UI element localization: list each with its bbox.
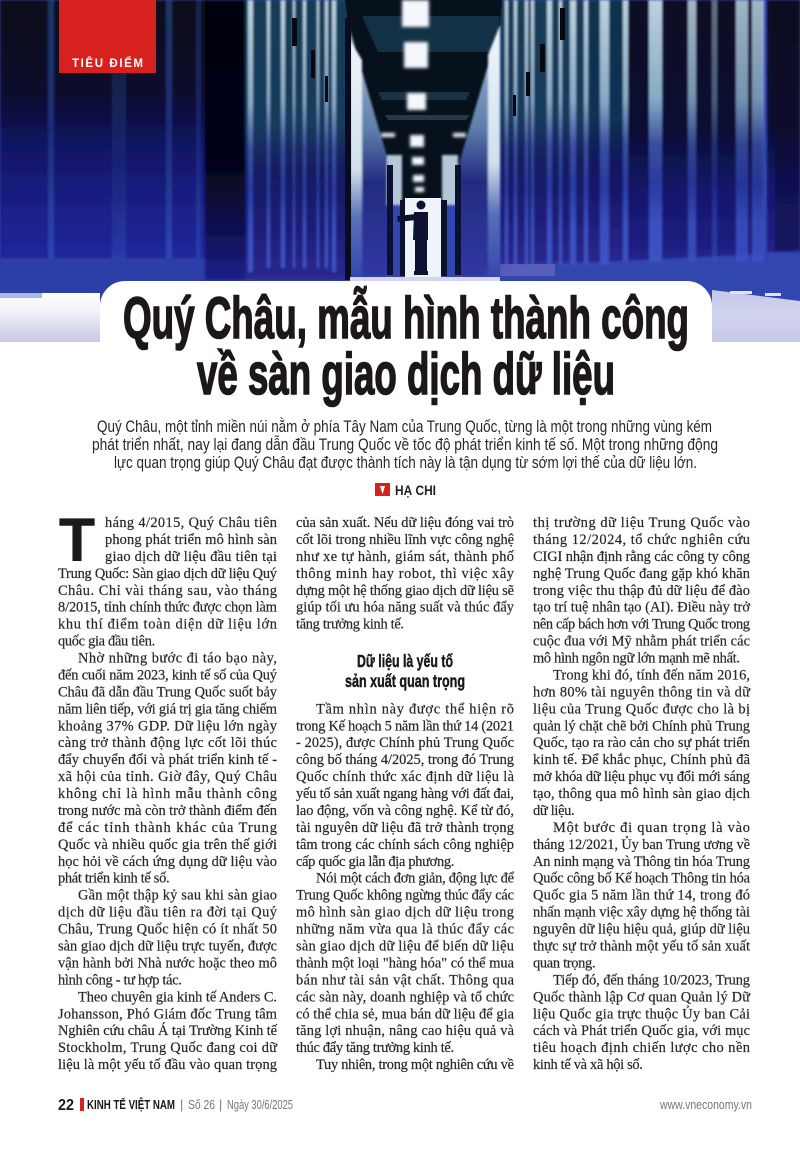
paragraph 10 xyxy=(533,668,751,819)
paragraph 2: đến cuối năm 2023, kinh tế số của Quý xyxy=(58,668,278,684)
paragraph 6: - 2025), được Chính phủ Trung Quốc xyxy=(296,735,514,751)
paragraph 2: học hỏi về cách ứng dụng dữ liệu vào xyxy=(58,854,277,870)
title card xyxy=(100,281,712,342)
paragraph 4: Nghiên cứu châu Á tại Trường Kinh tế xyxy=(58,1022,278,1039)
column 2 xyxy=(296,515,515,1073)
paragraph 6: trong Kế hoạch 5 năm lần thứ 14 (2021 xyxy=(296,718,514,734)
paragraph 5: thông minh hay robot, thì việc xây xyxy=(296,566,515,582)
paragraph 4: Johansson, Phó Giám đốc Trung tâm xyxy=(58,1006,277,1022)
paragraph 9: tháng 12/2024, tổ chức nghiên cứu xyxy=(533,532,750,548)
paragraph 5 xyxy=(296,515,515,633)
paragraph 2: năm liên tiếp, với giá trị gia tăng chiếm xyxy=(58,701,277,717)
title xyxy=(123,286,689,407)
paragraph 5: giúp tối ưu hóa năng suất và thúc đẩy xyxy=(296,600,515,616)
paragraph 3 xyxy=(58,888,278,988)
paragraph 5: của sản xuất. Nếu dữ liệu đóng vai trò xyxy=(296,515,514,531)
paragraph 1: Châu. Chỉ vài tháng sau, vào tháng xyxy=(58,583,277,599)
paragraph 3: vận hành bởi Nhà nước hoặc theo mô xyxy=(58,955,277,971)
paragraph 7: các sàn này, doanh nghiệp và tổ chức xyxy=(296,989,514,1005)
footer xyxy=(58,1097,752,1114)
paragraph 7: Nói một cách đơn giản, động lực để xyxy=(316,871,515,887)
paragraph 6: công bố tháng 4/2025, trong đó Trung xyxy=(296,752,514,768)
paragraph 1: phong phát triển mô hình sàn xyxy=(105,532,277,548)
paragraph 9: tạo trí tuệ nhân tạo (AI). Điều này trở xyxy=(533,600,750,616)
subheading xyxy=(345,651,465,691)
paragraph 7: thúc đẩy tăng trưởng kinh tế. xyxy=(296,1040,454,1056)
paragraph 10: Quốc, tạo ra rào cản cho sự phát triển xyxy=(533,735,750,751)
issue and date: | xyxy=(180,1098,183,1112)
subheading: Dữ liệu là yếu tố xyxy=(357,651,453,671)
byline: HẠ CHI xyxy=(395,482,436,498)
footer: Số 26 xyxy=(188,1098,215,1112)
paragraph 12: liệu Quốc gia trực thuộc Ủy ban Cải xyxy=(533,1005,750,1022)
paragraph 7: sàn giao dịch dữ liệu để biến dữ liệu xyxy=(296,938,514,954)
paragraph 9: cuộc đua với Mỹ nhằm phát triển các xyxy=(533,634,750,650)
paragraph 7 xyxy=(296,871,515,1056)
column 3 xyxy=(533,515,751,1073)
paragraph 10: kinh tế. Để khắc phục, Chính phủ đã xyxy=(533,752,751,768)
paragraph 2: khoảng 37% GDP. Dữ liệu lớn ngày xyxy=(58,718,278,734)
paragraph 1: khu thí điểm toàn diện dữ liệu lớn xyxy=(58,617,277,633)
drop cap: T xyxy=(59,506,95,574)
paragraph 11: An ninh mạng và Thông tin hóa Trung xyxy=(533,854,750,870)
paragraph 7: thành một loại "hàng hóa" có thể mua xyxy=(296,955,515,971)
paragraph 10: quản lý chặt chẽ bởi Chính phủ Trung xyxy=(533,718,750,734)
paragraph 12: kinh tế và xã hội số. xyxy=(533,1057,643,1073)
byline xyxy=(375,482,436,498)
paragraph 5: cốt lõi trong nhiều lĩnh vực công nghệ xyxy=(296,532,514,548)
paragraph 11 xyxy=(533,820,751,971)
paragraph 2: đẩy chuyển đổi và phát triển kinh tế - xyxy=(58,752,277,768)
paragraph 2: không chỉ là hình mẫu thành công xyxy=(58,786,277,802)
section tag: TIÊU ĐIỂM: TIÊU ĐIỂM xyxy=(72,57,143,70)
paragraph 3: dịch dữ liệu đầu tiên ra đời tại Quý xyxy=(58,905,278,921)
paragraph 2: xã hội của tỉnh. Giờ đây, Quý Châu xyxy=(58,769,277,785)
paragraph 3: sàn giao dịch dữ liệu trực tuyến, được xyxy=(58,938,277,954)
paragraph 2: phát triển kinh tế số. xyxy=(58,871,169,887)
paragraph 2: trong nước mà còn trở thành điểm đến xyxy=(58,803,277,819)
intro paragraph xyxy=(92,417,718,472)
paragraph 6: tài nguyên dữ liệu đã trở thành trọng xyxy=(296,820,514,836)
paragraph 7: Trung Quốc không ngừng thúc đẩy các xyxy=(296,888,514,904)
paragraph 12: cách và Phát triển Quốc gia, với mục xyxy=(533,1023,750,1039)
paragraph 12: Quốc thành lập Cơ quan Quản lý Dữ xyxy=(533,989,751,1005)
paragraph 7: có thể chia sẻ, mua bán dữ liệu để gia xyxy=(296,1006,515,1022)
paragraph 2: Quốc và nhiều quốc gia trên thế giới xyxy=(58,837,277,853)
paragraph 6 xyxy=(296,701,515,870)
paragraph 9: nghệ Trung Quốc đang gặp khó khăn xyxy=(533,566,750,582)
hero photo: data centre corridor xyxy=(0,0,800,342)
paragraph 1: giao dịch dữ liệu đầu tiên tại xyxy=(105,549,277,565)
paragraph 6: yếu tố sản xuất ngang hàng với đất đai, xyxy=(296,786,514,802)
paragraph 2: càng trở thành động lực cốt lõi thúc xyxy=(58,735,277,751)
red marker xyxy=(80,1098,84,1111)
paragraph 5: tăng trưởng kinh tế. xyxy=(296,617,404,633)
paragraph 4: Theo chuyên gia kinh tế Anders C. xyxy=(78,989,277,1005)
paragraph 11: Quốc gia 5 năm lần thứ 14, trong đó xyxy=(533,888,750,904)
paragraph 10: hơn 80% tài nguyên thông tin và dữ xyxy=(533,684,751,700)
icon: man standing in corridor xyxy=(397,200,428,275)
paragraph 6: cấp quốc gia lẫn địa phương. xyxy=(296,854,454,870)
paragraph 5: như xe tự hành, giám sát, thành phố xyxy=(296,549,514,565)
paragraph 9 xyxy=(533,515,750,666)
paragraph 9: nên cấp bách hơn với Trung Quốc trong xyxy=(533,617,750,633)
paragraph 12 xyxy=(533,972,751,1073)
paragraph 9: mô hình ngôn ngữ lớn mạnh mẽ nhất. xyxy=(533,650,740,666)
subheading: sản xuất quan trọng xyxy=(345,671,465,691)
section tag: TIÊU ĐIỂM xyxy=(59,0,156,73)
paragraph 10: Trong khi đó, tính đến năm 2016, xyxy=(553,668,750,684)
paragraph 6: lao động, vốn và công nghệ. Kể từ đó, xyxy=(296,803,514,819)
paragraph 11: tháng 12/2021, Ủy ban Trung ương về xyxy=(533,836,750,853)
paragraph 9: CIGI nhận định rằng các công ty công xyxy=(533,549,750,565)
paragraph 4: Stockholm, Trung Quốc đang coi dữ xyxy=(58,1040,278,1056)
paragraph 3: hình công - tư hợp tác. xyxy=(58,972,182,988)
paragraph 2 xyxy=(58,650,278,887)
paragraph 7: mô hình sàn giao dịch dữ liệu trong xyxy=(296,905,514,921)
paragraph 10: dữ liệu. xyxy=(533,803,574,819)
paragraph 1: Trung Quốc: Sàn giao dịch dữ liệu Quý xyxy=(58,566,278,582)
paragraph 4: liệu là một yếu tố đầu vào quan trọng xyxy=(58,1057,277,1073)
footer: | xyxy=(219,1098,222,1112)
paragraph 3: Gần một thập kỷ sau khi sàn giao xyxy=(78,888,277,904)
paragraph 7: tăng lợi nhuận, nâng cao hiệu quả và xyxy=(296,1023,515,1039)
paragraph 12: Tiếp đó, đến tháng 10/2023, Trung xyxy=(553,972,750,988)
paragraph 9: trong việc thu thập đủ dữ liệu để đào xyxy=(533,583,750,599)
column 1 xyxy=(58,506,278,1073)
paragraph 11: nguyên dữ liệu hiệu quả, giúp dữ liệu xyxy=(533,922,750,938)
paragraph 1: quốc gia đầu tiên. xyxy=(58,634,155,650)
paragraph 6: Quốc chính thức xác định dữ liệu là xyxy=(296,769,515,785)
paragraph 2: để các tỉnh thành khác của Trung xyxy=(58,820,277,836)
paragraph 5: dựng một hệ thống giao dịch dữ liệu sẽ xyxy=(296,583,514,599)
paragraph 1: háng 4/2015, Quý Châu tiên xyxy=(105,515,277,531)
paragraph 11: thực sự trở thành một yếu tố sản xuất xyxy=(533,938,750,954)
paragraph 2: Nhờ những bước đi táo bạo này, xyxy=(78,650,277,666)
paragraph 2: Châu đã dẫn đầu Trung Quốc suốt bảy xyxy=(58,684,278,700)
white area under the hero xyxy=(0,342,800,1158)
paragraph 4 xyxy=(58,989,278,1073)
paragraph 7: bán như tài sản vật chất. Thông qua xyxy=(296,972,515,988)
paragraph 8: Tuy nhiên, trong một nghiên cứu về xyxy=(316,1057,514,1073)
paragraph 10: tạo, thông qua mô hình sàn giao dịch xyxy=(533,786,750,802)
publication name: KINH TẾ VIỆT NAM xyxy=(87,1097,175,1112)
website: www.vneconomy.vn xyxy=(659,1098,752,1112)
footer: Ngày 30/6/2025 xyxy=(227,1098,293,1112)
paragraph 10: liệu của Trung Quốc được cho là bị xyxy=(533,701,750,717)
paragraph 1: 8/2015, tỉnh chính thức được chọn làm xyxy=(58,600,277,616)
paragraph 9: thị trường dữ liệu Trung Quốc vào xyxy=(533,515,750,531)
paragraph 11: nhấn mạnh việc xây dựng hệ thống tài xyxy=(533,905,750,921)
paragraph 6: Tầm nhìn này được thể hiện rõ xyxy=(316,701,514,717)
paragraph 6: tâm trong các chính sách công nghiệp xyxy=(296,837,514,853)
paragraph 1 xyxy=(58,515,278,650)
paragraph 3: Châu, Trung Quốc hiện có ít nhất 50 xyxy=(58,922,277,938)
paragraph 11: Quốc công bố Kế hoạch Thông tin hóa xyxy=(533,871,751,887)
paragraph 7: những năm vừa qua là thúc đẩy các xyxy=(296,922,514,938)
paragraph 12: tiêu hoạch định chiến lược cho nền xyxy=(533,1040,750,1056)
paragraph 11: Một bước đi quan trọng là vào xyxy=(553,820,750,836)
page number: 22 xyxy=(58,1097,74,1114)
paragraph 10: mở khóa dữ liệu phục vụ đổi mới sáng xyxy=(533,769,750,785)
paragraph 11: quan trọng. xyxy=(533,955,595,971)
